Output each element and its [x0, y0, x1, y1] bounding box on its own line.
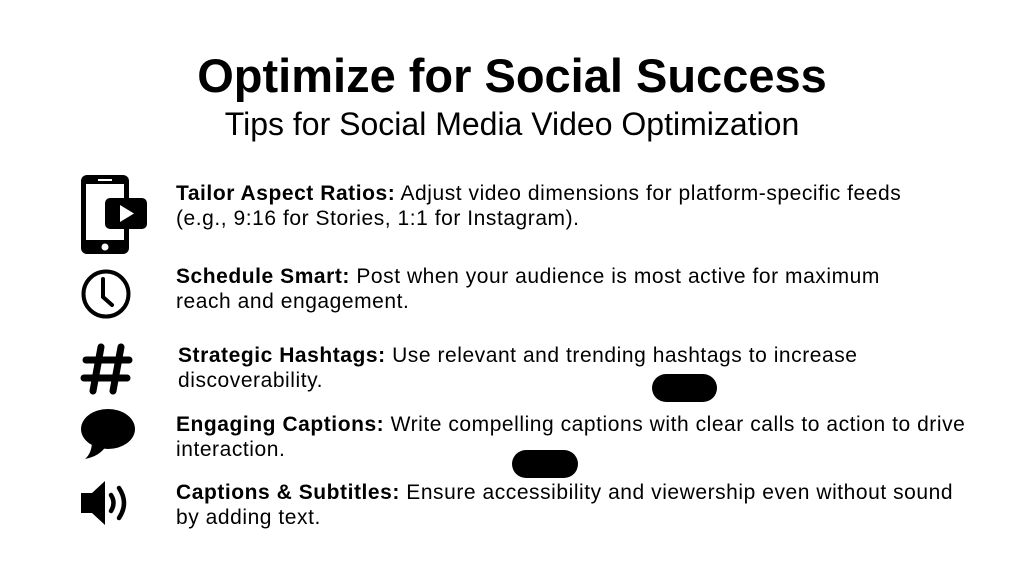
title: Optimize for Social Success: [197, 49, 827, 102]
text: hashtags: Strategic Hashtags: Use relevant and trending hashtags to increase: [178, 344, 857, 367]
text: captions: Engaging Captions: Write compelling captions with clear calls to action to drive: [176, 413, 965, 436]
icon: clock: [82, 270, 130, 318]
text: tailor: (e.g., 9:16 for Stories, 1:1 for Instagram).: [176, 207, 580, 230]
decorative pill 1: [652, 374, 717, 402]
text: schedule: [176, 265, 880, 313]
text: schedule: Schedule Smart: Post when your audience is most active for maximum: [176, 265, 880, 288]
text: subtitles: by adding text.: [176, 506, 321, 529]
text: schedule: reach and engagement.: [176, 290, 409, 313]
text: captions: interaction.: [176, 438, 285, 461]
text: subtitles: Captions & Subtitles: Ensure accessibility and viewership even without sound: [176, 481, 953, 504]
text: subtitles: [176, 481, 953, 529]
icon: speech bubble: [81, 409, 135, 459]
text: tailor: Tailor Aspect Ratios: Adjust video dimensions for platform-specific feeds: [176, 182, 901, 205]
text: tailor: [176, 182, 901, 230]
icon: speaker: [81, 481, 126, 525]
text: hashtags: discoverability.: [178, 369, 323, 392]
decorative pill 2: [512, 450, 578, 478]
text: hashtags: [178, 344, 857, 392]
subtitle: Tips for Social Media Video Optimization: [225, 106, 799, 142]
text: captions: [176, 413, 965, 461]
icon: phone with play: [81, 175, 147, 254]
icon: hashtag: [80, 344, 132, 394]
